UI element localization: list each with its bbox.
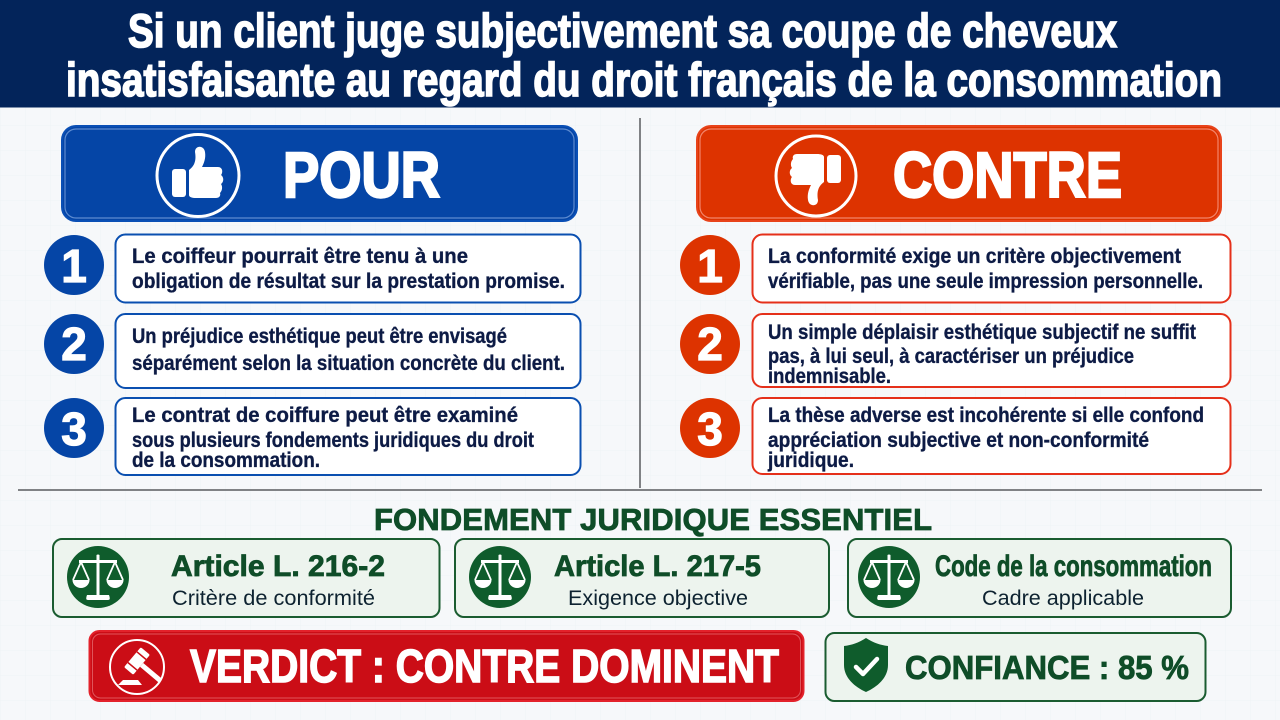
card: article L. 216-2: Critère de conformité — [172, 587, 375, 610]
argument 2: indemnisable. — [768, 365, 891, 388]
card: article L. 216-2 — [53, 539, 440, 617]
panel: contre — [680, 126, 1230, 474]
icon: shield — [844, 638, 888, 692]
icon: scales — [67, 546, 129, 608]
icon: scales — [858, 546, 920, 608]
argument 3: 3 — [697, 403, 723, 455]
argument 3: Le contrat de coiffure peut être examiné — [132, 404, 518, 427]
heading: contre: CONTRE — [893, 139, 1122, 211]
argument 1: 1 — [697, 240, 723, 292]
card: article L. 216-2: Article L. 216-2 — [171, 550, 385, 583]
argument 2 — [44, 314, 580, 388]
argument 3: La thèse adverse est incohérente si elle confond — [768, 404, 1204, 427]
heading: fondement juridique: FONDEMENT JURIDIQUE ESSENTIEL — [374, 502, 932, 537]
heading: pour: POUR — [283, 139, 440, 211]
card: article L. 217-5 — [455, 539, 829, 617]
argument 1: vérifiable, pas une seule impression personnelle. — [768, 270, 1203, 293]
heading: pour — [62, 126, 577, 221]
argument 2: 2 — [61, 318, 87, 370]
argument 3: juridique. — [767, 449, 854, 472]
title banner — [0, 0, 1280, 108]
argument 3: sous plusieurs fondements juridiques du droit — [132, 429, 534, 452]
argument 2 — [680, 314, 1230, 388]
card: code de la consommation: Cadre applicable — [982, 587, 1144, 610]
confidence badge — [826, 633, 1206, 701]
panel: pour — [44, 126, 580, 475]
argument 2: 2 — [697, 318, 723, 370]
argument 1 — [680, 234, 1230, 302]
card: article L. 217-5: Exigence objective — [568, 587, 748, 610]
argument 2: séparément selon la situation concrète du client. — [132, 352, 565, 375]
icon: thumbs down — [776, 136, 856, 216]
argument 3: appréciation subjective et non-conformité — [768, 429, 1149, 452]
argument 1: La conformité exige un critère objectivement — [768, 245, 1181, 268]
verdict banner — [90, 631, 804, 701]
argument 3 — [44, 398, 580, 475]
argument 1: obligation de résultat sur la prestation promise. — [132, 270, 565, 293]
argument 3: 3 — [61, 403, 87, 455]
verdict banner: VERDICT : CONTRE DOMINENT — [190, 640, 779, 692]
icon: scales — [469, 546, 531, 608]
argument 2: pas, à lui seul, à caractériser un préjudice — [768, 345, 1134, 368]
argument 3 — [680, 398, 1230, 474]
argument 1 — [44, 234, 580, 302]
card: article L. 217-5: Article L. 217-5 — [554, 550, 761, 583]
argument 2: Un simple déplaisir esthétique subjectif ne suffit — [768, 321, 1196, 344]
icon: gavel — [110, 640, 168, 694]
argument 2: Un préjudice esthétique peut être envisagé — [132, 325, 507, 348]
icon: thumbs up — [157, 134, 239, 216]
card: code de la consommation — [848, 539, 1231, 617]
confidence badge: CONFIANCE : 85 % — [905, 649, 1189, 686]
argument 1: Le coiffeur pourrait être tenu à une — [132, 245, 468, 268]
heading: contre — [697, 126, 1221, 221]
argument 1: 1 — [61, 240, 87, 292]
argument 3: de la consommation. — [132, 449, 320, 472]
